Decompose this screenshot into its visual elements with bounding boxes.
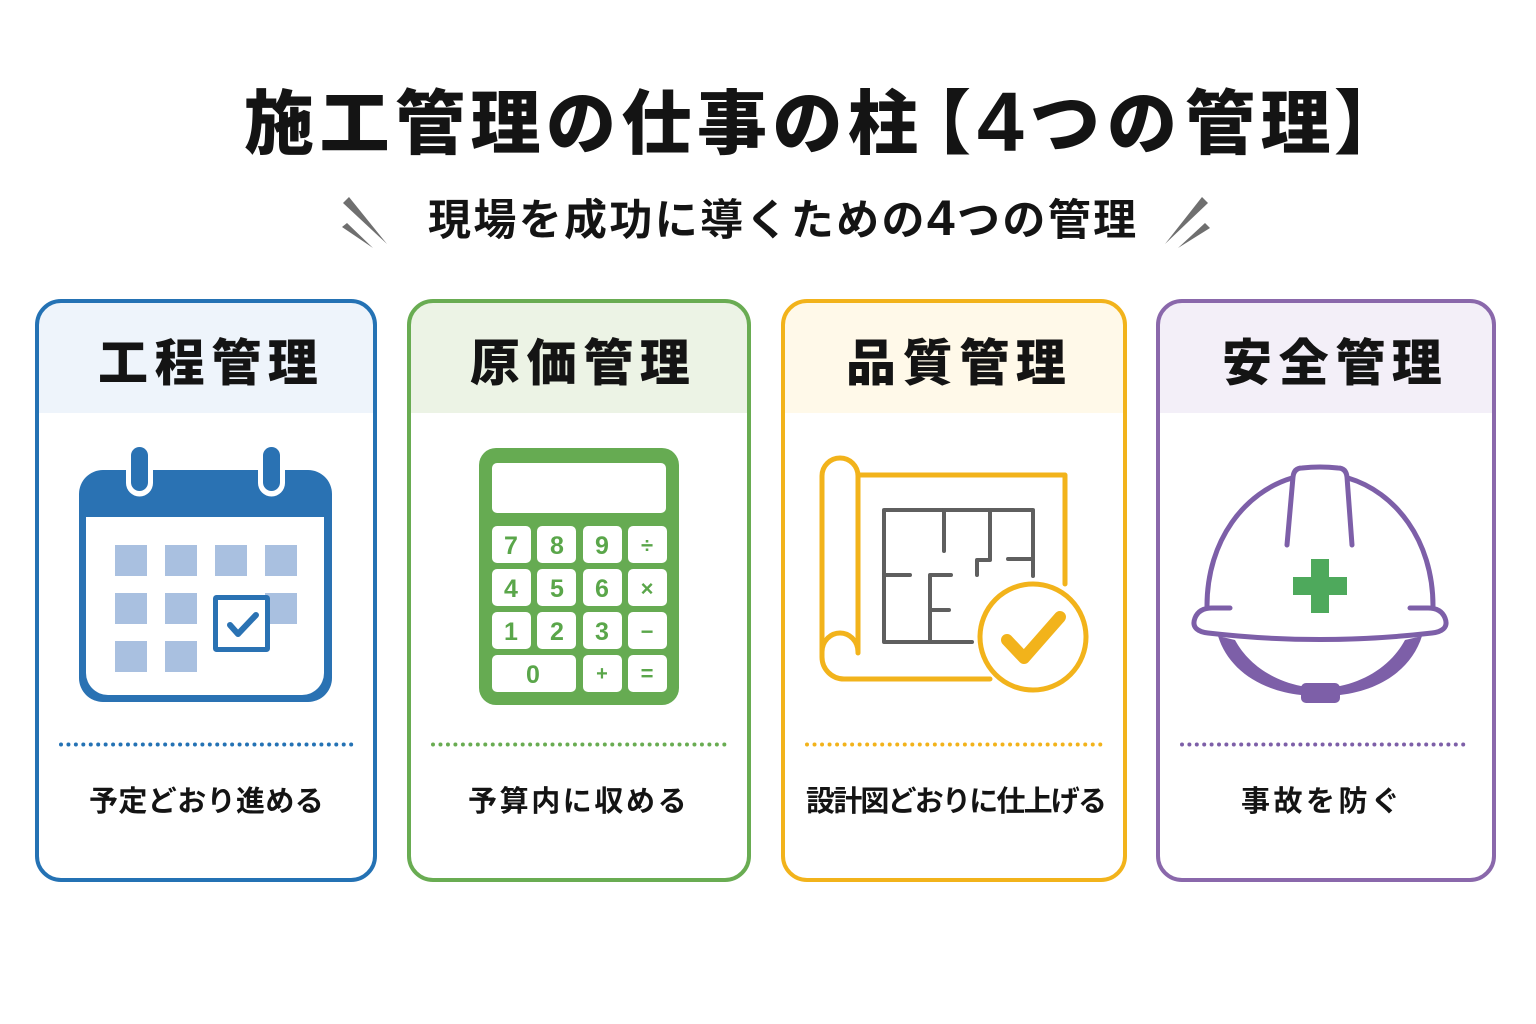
- title: 管理: [1185, 85, 1336, 163]
- title: 4: [977, 75, 1024, 169]
- icon: calculator: [479, 448, 679, 705]
- icon: calculator: 9: [595, 532, 609, 560]
- accent: right spark lines: [1165, 197, 1210, 248]
- caption: 予定どおり進める: 予定どおり進める: [89, 785, 324, 818]
- icon: calculator: 1: [504, 618, 518, 646]
- icon: calculator: 4: [504, 575, 518, 603]
- icon: calendar: [79, 447, 332, 702]
- icon: calculator: 6: [595, 575, 609, 603]
- icon: calculator: =: [641, 661, 653, 686]
- icon: blueprint with check: [822, 458, 1086, 690]
- icon: calculator: 7: [504, 532, 518, 560]
- title: 施工管理の仕事の柱: [244, 85, 924, 163]
- icon: calculator: +: [596, 663, 608, 685]
- heading: 品質管理: 品質管理: [846, 336, 1072, 392]
- heading: 原価管理: 原価管理: [470, 336, 696, 392]
- panel: cost management: [409, 301, 749, 880]
- title: つ: [1030, 85, 1100, 163]
- accent: left spark lines: [342, 197, 387, 248]
- icon: calculator: −: [641, 619, 653, 644]
- title: の: [1107, 85, 1177, 163]
- icon: calculator: 0: [526, 661, 540, 689]
- caption: 事故を防ぐ: 事故を防ぐ: [1241, 785, 1404, 818]
- icon: hard hat with cross: [1194, 467, 1446, 703]
- title: 【: [901, 85, 971, 163]
- caption: 予算内に収める: 予算内に収める: [468, 785, 689, 818]
- icon: calculator: 2: [550, 618, 564, 646]
- subtitle: 現場を成功に導くための4つの管理: [428, 190, 1138, 246]
- panel: schedule management: [37, 301, 375, 880]
- caption: 設計図どおりに仕上げる: 設計図どおりに仕上げる: [806, 785, 1105, 818]
- icon: calculator: 8: [550, 532, 564, 560]
- heading: 安全管理: 安全管理: [1222, 336, 1448, 392]
- title: 】: [1334, 85, 1404, 163]
- icon: calculator: 5: [550, 575, 564, 603]
- panel: safety management: [1158, 301, 1494, 880]
- icon: calculator: 3: [595, 618, 609, 646]
- icon: calculator: ÷: [641, 533, 653, 558]
- heading: 工程管理: 工程管理: [98, 336, 324, 392]
- panel: quality management: [783, 301, 1125, 880]
- icon: calculator: ×: [641, 576, 653, 601]
